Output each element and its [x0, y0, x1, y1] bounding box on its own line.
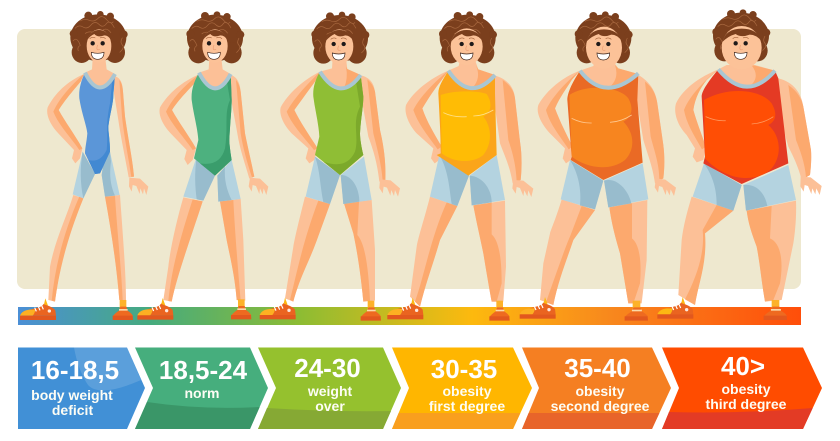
left leg	[540, 199, 595, 305]
neck	[448, 60, 495, 88]
chevron: 16-18,5 body weight deficit: 16-18,5	[31, 355, 119, 385]
chevron: 40> obesity third degree: 40>	[721, 351, 765, 381]
figure 3: weight over	[260, 12, 400, 321]
left leg	[285, 197, 330, 302]
chevron: 24-30 weight over: over	[315, 398, 345, 414]
chevron: 18,5-24 norm: norm	[184, 385, 220, 401]
chevron: 24-30 weight over: weight	[307, 383, 352, 399]
chevron: 16-18,5 body weight deficit	[18, 348, 145, 429]
chevron: 18,5-24 norm	[135, 348, 268, 429]
chevron: 35-40 obesity second degree	[522, 348, 671, 429]
right leg	[609, 200, 647, 303]
chevron: 40> obesity third degree	[662, 348, 822, 429]
chevron: 35-40 obesity second degree: obesity	[575, 383, 625, 399]
shorts	[561, 160, 648, 209]
chevron: 40> obesity third degree: obesity	[721, 381, 771, 397]
tank top	[567, 71, 643, 180]
background panel	[17, 29, 801, 289]
leotard	[79, 73, 115, 174]
leotard	[313, 72, 363, 175]
leotard	[437, 71, 497, 176]
right leg	[220, 199, 245, 301]
right leg	[105, 195, 126, 300]
floor gradient bar	[18, 307, 801, 325]
left leg	[410, 197, 457, 307]
shoes	[137, 298, 251, 320]
right arm and hand	[637, 75, 676, 196]
shoes	[387, 298, 510, 321]
face	[325, 29, 353, 64]
right leg	[473, 201, 506, 302]
right arm and hand	[361, 75, 400, 197]
shorts	[693, 163, 796, 211]
left leg	[163, 197, 203, 302]
tank top	[702, 69, 788, 184]
right arm and hand	[778, 78, 822, 195]
figure 2: norm	[137, 11, 268, 320]
figure 4: obesity first degree	[387, 11, 533, 321]
right leg	[747, 201, 796, 302]
left leg	[48, 195, 83, 302]
chevron: 30-35 obesity first degree	[392, 348, 532, 429]
face	[202, 29, 228, 63]
chevron: 18,5-24 norm: 18,5-24	[159, 355, 248, 385]
leotard	[192, 73, 232, 176]
left arm	[280, 72, 320, 163]
shorts	[73, 152, 120, 198]
hair	[575, 11, 633, 63]
shorts	[183, 157, 241, 202]
chevron: 30-35 obesity first degree: obesity	[442, 383, 492, 399]
figure 1: body weight deficit	[20, 11, 148, 320]
neck	[320, 58, 361, 88]
left arm	[675, 69, 718, 162]
chevron: 40> obesity third degree: third degree	[706, 396, 787, 412]
left leg	[678, 197, 733, 305]
shoes	[20, 298, 133, 320]
face	[586, 27, 622, 69]
chevron: 24-30 weight over	[258, 348, 401, 429]
shoes	[520, 297, 648, 321]
face	[87, 29, 111, 63]
neck	[85, 58, 115, 88]
shoes	[260, 298, 381, 321]
chevron: 35-40 obesity second degree: 35-40	[564, 353, 631, 383]
neck	[580, 62, 638, 89]
left arm	[47, 74, 84, 163]
hair	[311, 12, 369, 64]
chevron: 30-35 obesity first degree: 30-35	[431, 354, 497, 384]
hair	[70, 11, 128, 63]
neck	[718, 65, 775, 88]
left arm	[159, 74, 200, 165]
right arm and hand	[230, 75, 268, 195]
hair	[186, 11, 244, 63]
right leg	[344, 200, 375, 302]
face	[722, 26, 762, 69]
shoes	[657, 297, 787, 320]
chevron: 16-18,5 body weight deficit: body weight	[31, 387, 113, 403]
figure 5: obesity second degree	[520, 11, 676, 321]
left arm	[538, 71, 580, 163]
chevron: 35-40 obesity second degree: second degree	[551, 398, 650, 414]
left arm	[405, 71, 448, 163]
neck	[199, 58, 231, 88]
shorts	[430, 155, 505, 206]
right arm and hand	[494, 75, 533, 197]
chevron: 24-30 weight over: 24-30	[294, 353, 361, 383]
right arm and hand	[114, 76, 148, 195]
hair	[439, 11, 497, 63]
chevron: 16-18,5 body weight deficit: deficit	[52, 402, 93, 418]
figure 6: obesity third degree	[657, 9, 822, 320]
hair	[712, 9, 770, 61]
face	[451, 28, 483, 65]
shorts	[306, 157, 372, 204]
chevron: 30-35 obesity first degree: first degree	[429, 398, 505, 414]
